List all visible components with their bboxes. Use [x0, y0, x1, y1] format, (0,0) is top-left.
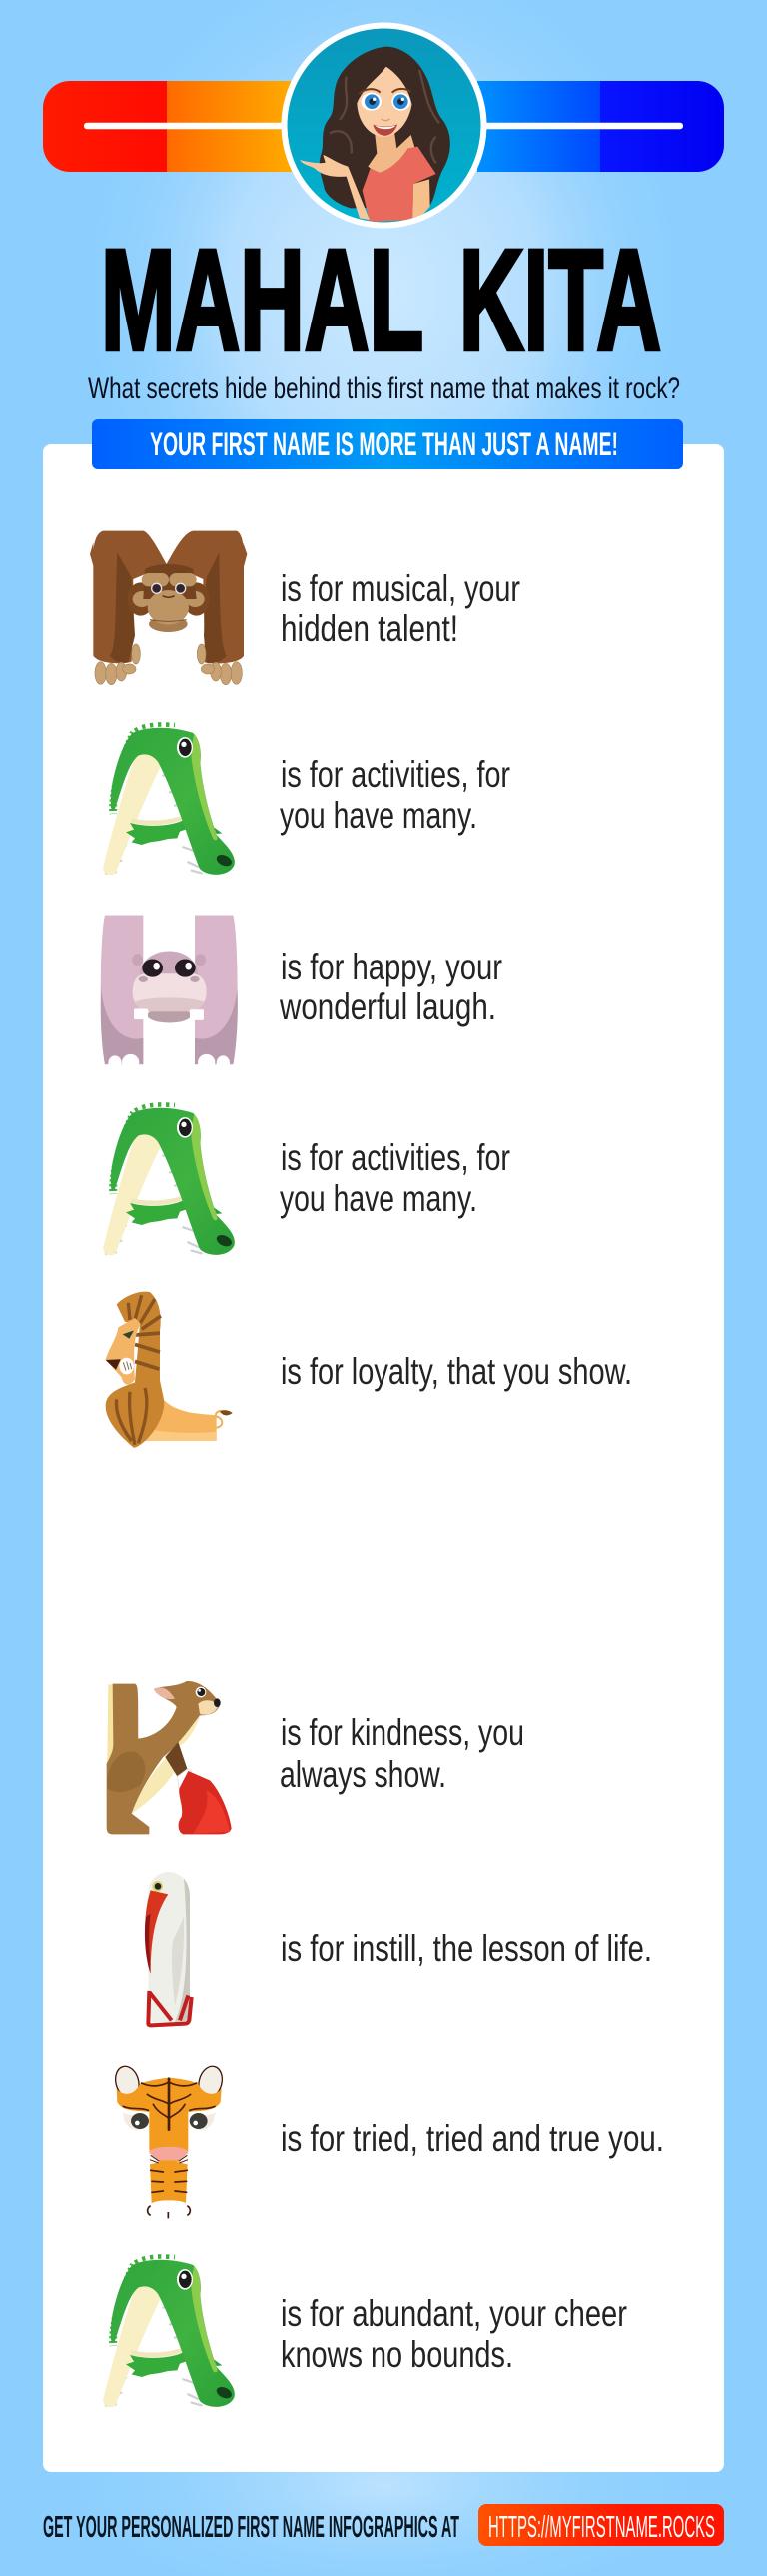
footer link button — [478, 2504, 724, 2546]
text: I line: is for instill, the lesson of life. — [281, 1928, 652, 1969]
text: T line: is for tried, tried and true you. — [281, 2118, 664, 2159]
banner — [92, 419, 683, 469]
text: K line: is for kindness, you — [281, 1712, 524, 1753]
text: H line: wonderful laugh. — [279, 986, 496, 1027]
text: A line: is for activities, for — [281, 1137, 510, 1178]
text: A line: knows no bounds. — [281, 2334, 513, 2375]
avatar portrait — [282, 22, 487, 228]
icon: stork letter I — [145, 1872, 192, 2025]
header colour bar — [43, 81, 724, 172]
text: H line: is for happy, your — [281, 947, 502, 987]
icon: crocodile letter A — [103, 2256, 235, 2407]
text: K line: always show. — [280, 1754, 446, 1795]
icon: tiger letter T — [112, 2064, 226, 2219]
text: A line: you have many. — [280, 795, 477, 836]
text: A line: is for activities, for — [281, 754, 510, 795]
text: M line: is for musical, your — [281, 568, 520, 609]
white content panel — [43, 444, 724, 2472]
text: A line: is for abundant, your cheer — [281, 2293, 627, 2334]
text: L line: is for loyalty, that you show. — [281, 1351, 632, 1392]
icon: crocodile letter A — [103, 724, 235, 875]
text: A line: you have many. — [280, 1178, 477, 1219]
text: M line: hidden talent! — [281, 608, 458, 649]
icon: lion letter L — [106, 1292, 233, 1448]
icon: monkey letter M — [90, 531, 247, 685]
icon: hippo letter H — [93, 916, 243, 1076]
icon: crocodile letter A — [103, 1104, 235, 1255]
icon: kangaroo letter K — [107, 1681, 232, 1834]
